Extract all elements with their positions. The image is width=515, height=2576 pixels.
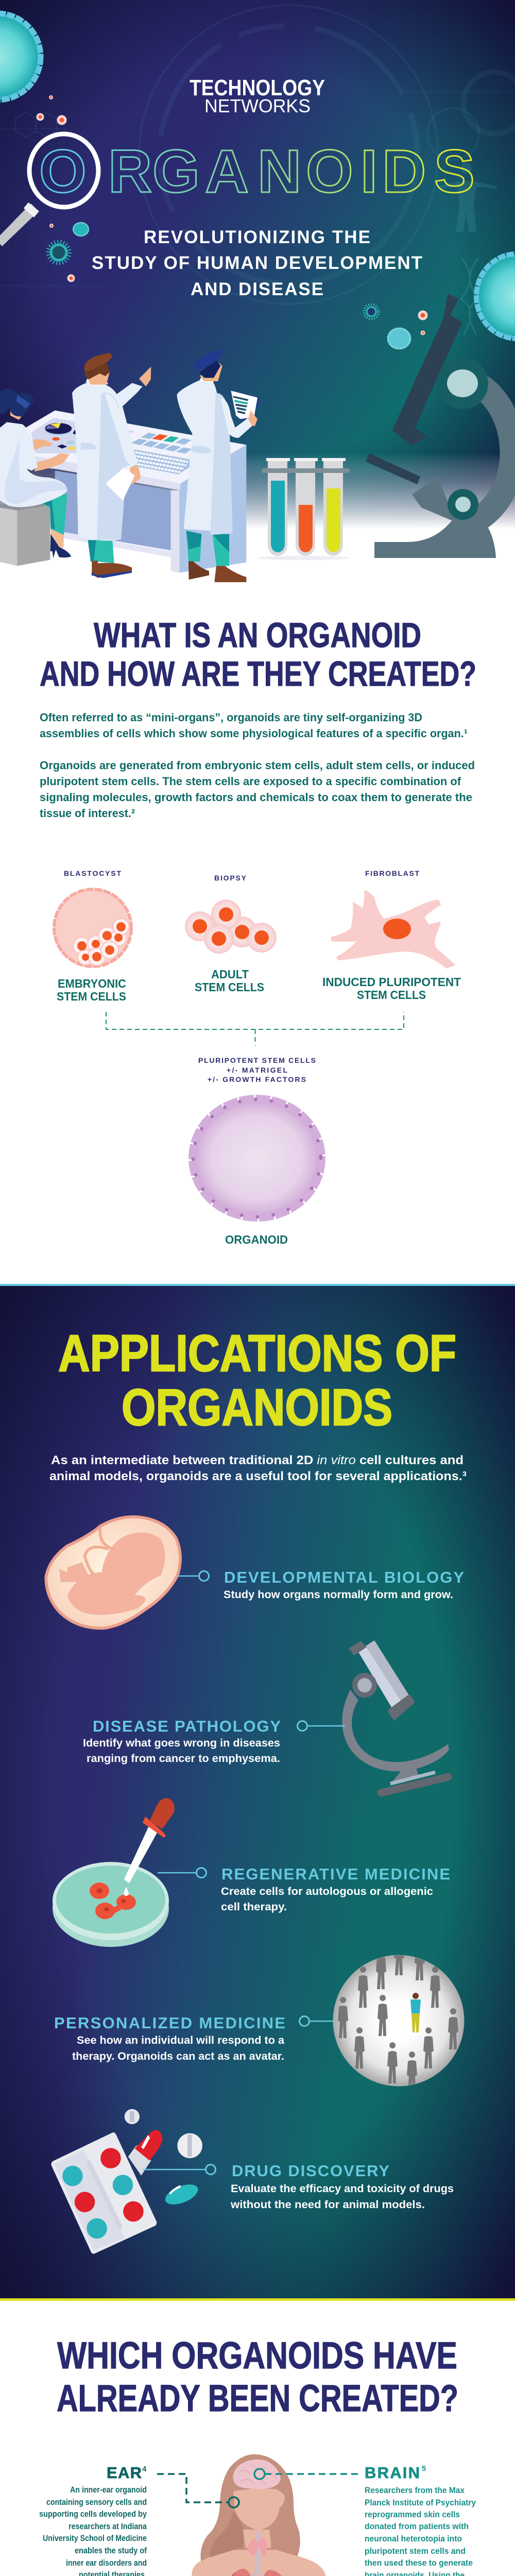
lungs [217,2569,253,2576]
logo: Technology Networks [190,75,325,116]
icon: virus right [364,304,379,319]
label: biopsy: BIOPSY [214,874,247,882]
text block: ear: researchers at Indiana [68,2522,147,2531]
text block: ear: inner ear disorders and [66,2558,147,2568]
intro paragraph: Often referred to as “mini-organs”, organoids are tiny self-organizing 3D [40,711,422,724]
icon: embryo [46,1517,180,1628]
label: induced pluripotent stem cells: INDUCED PLURIPOTENT [322,975,461,989]
text block: brain: donated from patients with [365,2522,469,2531]
text block: brain: Researchers from the Max [365,2486,465,2495]
scientist: man with clipboard [177,349,260,582]
logo: Technology Networks: NETWORKS [204,95,311,116]
text: regenerative medicine: Create cells for autologous or allogenic [221,1886,433,1897]
illustration: microscope [366,294,512,558]
icon: large cell right [476,254,515,338]
text: regenerative medicine [221,1865,450,1913]
connector [177,1571,209,1581]
heading: WHAT IS AN ORGANOID [94,616,421,655]
icon: adult stem cells [185,900,277,954]
label: blastocyst: BLASTOCYST [64,869,121,877]
text block: ear: University School of Medicine [43,2534,147,2543]
text: disease pathology [83,1717,281,1765]
label: pluripotent stem cells matrigel growth factors: +/- MATRIGEL [227,1066,287,1074]
scientist: seated woman [0,388,71,558]
label: pluripotent stem cells matrigel growth factors: PLURIPOTENT STEM CELLS [198,1056,316,1064]
brain [233,2460,281,2489]
text: drug discovery: without the need for animal models. [230,2199,425,2211]
text block: ear [39,2464,147,2576]
illustration: test tubes [258,458,350,560]
text block: ear: supporting cells developed by [39,2510,147,2519]
text block: brain: then used these to generate [365,2558,473,2568]
label: fibroblast: FIBROBLAST [365,869,419,877]
text: personalized medicine: See how an individual will respond to a [77,2035,284,2046]
text block: ear: enables the study of [75,2546,147,2555]
text: developmental biology: Study how organs normally form and grow. [224,1589,453,1601]
intro text: animal models, organoids are a useful tool for several applications.³ [49,1469,467,1483]
white fade [0,453,515,529]
text: drug discovery [230,2162,454,2211]
connector: ear [157,2474,239,2507]
panel: applications of organoids [0,1284,515,2301]
text block: brain: pluripotent stem cells and [365,2547,466,2556]
heading [57,2335,458,2419]
icon: magnifying glass [0,134,98,246]
second paragraph: Organoids are generated from embryonic stem cells, adult stem cells, or induced [40,759,475,772]
panel: hero [0,0,515,582]
text: drug discovery: Evaluate the efficacy and toxicity of drugs [231,2183,454,2195]
text block: ear: 4 [142,2465,147,2473]
hair [200,2454,300,2561]
icon: petri dish and dropper [53,1798,175,1947]
text block: brain: Planck Institute of Psychiatry [365,2498,476,2507]
text: drug discovery: DRUG DISCOVERY [232,2162,389,2180]
label: induced pluripotent stem cells: STEM CELLS [357,988,426,1002]
subtitle [92,227,422,299]
logo: Technology Networks: TECHNOLOGY [190,75,325,100]
second paragraph: tissue of interest.² [40,807,135,820]
subtitle: REVOLUTIONIZING THE [144,227,370,247]
label: pluripotent stem cells matrigel growth factors [198,1056,316,1083]
heading: APPLICATIONS OF [58,1325,456,1382]
text: regenerative medicine: REGENERATIVE MEDICINE [221,1865,450,1883]
subtitle: STUDY OF HUMAN DEVELOPMENT [92,253,422,273]
text: disease pathology: Identify what goes wrong in diseases [83,1737,280,1749]
connector [300,2016,334,2026]
heading [58,1325,456,1436]
intro text: As an intermediate between traditional 2D in vitro cell cultures and [51,1453,464,1467]
connector [143,2165,215,2174]
panel: what is an organoid [40,616,476,1246]
icon: blastocyst [54,889,131,967]
icon: crowd in sphere [333,1955,465,2087]
title: ORGANOIDS: ORGANOIDS [39,138,475,206]
text: regenerative medicine: cell therapy. [221,1901,287,1913]
label: embryonic stem cells: STEM CELLS [57,990,126,1003]
text: personalized medicine [54,2014,285,2062]
icon: virus left [48,242,70,263]
connector [158,1868,206,1877]
text block: brain: neuronal heterotopia into [365,2534,462,2544]
face [233,2488,285,2530]
illustration: human body [173,2522,342,2576]
icon: large cell top left [0,13,41,100]
thyroid and trachea [251,2532,265,2576]
text block: ear: An inner-ear organoid [70,2485,147,2495]
desk [26,411,246,573]
text block: brain: reprogrammed skin cells [365,2510,460,2519]
intro paragraph: assemblies of cells which show some physiological features of a specific organ.¹ [40,727,468,740]
label: embryonic stem cells [57,977,126,1003]
label: adult stem cells [195,968,264,994]
second paragraph: signaling molecules, growth factors and chemicals to coax them to generate the [40,791,472,804]
text: personalized medicine: PERSONALIZED MEDICINE [54,2014,285,2032]
scientist: man pointing [72,353,151,578]
text block: brain: BRAIN [365,2464,420,2482]
stool [0,502,50,566]
second paragraph: pluripotent stem cells. The stem cells are exposed to a specific combination of [40,775,461,788]
connector: dashed bracket [106,1012,404,1045]
subtitle: AND DISEASE [191,279,323,299]
text block: ear: containing sensory cells and [46,2498,147,2507]
connector: brain [254,2469,358,2479]
person in colour [410,1993,421,2032]
intro paragraph [40,711,468,740]
label: induced pluripotent stem cells [322,975,461,1002]
intro text [49,1453,467,1483]
text: personalized medicine: therapy. Organoids can act as an avatar. [72,2050,284,2062]
illustration: head, hair and organs [200,2454,300,2576]
text block: ear: EAR [107,2464,142,2482]
label: embryonic stem cells: EMBRYONIC [58,977,126,990]
icon: microscope [342,1640,449,1793]
heading: ORGANOIDS [122,1379,392,1436]
label: pluripotent stem cells matrigel growth factors: +/- GROWTH FACTORS [208,1075,306,1083]
text: disease pathology: ranging from cancer to emphysema. [87,1753,280,1765]
heading [40,616,476,693]
illustration: scientists at console [0,349,260,582]
icon: fibroblast [332,891,455,968]
icon: organoid [192,1098,322,1218]
text: developmental biology [224,1568,464,1601]
icon: pills and blister pack [54,2109,202,2250]
label: adult stem cells: ADULT [211,968,249,981]
text: disease pathology: DISEASE PATHOLOGY [93,1717,281,1735]
text: developmental biology: DEVELOPMENTAL BIOLOGY [224,1568,464,1586]
label: organoid: ORGANOID [225,1233,288,1246]
icon: small cells [36,95,427,349]
panel: which organoids have already been created [33,2335,483,2576]
second paragraph [40,759,475,820]
text block: brain [365,2464,480,2576]
label: adult stem cells: STEM CELLS [195,980,264,994]
connector [298,1721,345,1731]
text block: brain: 5 [422,2464,426,2473]
